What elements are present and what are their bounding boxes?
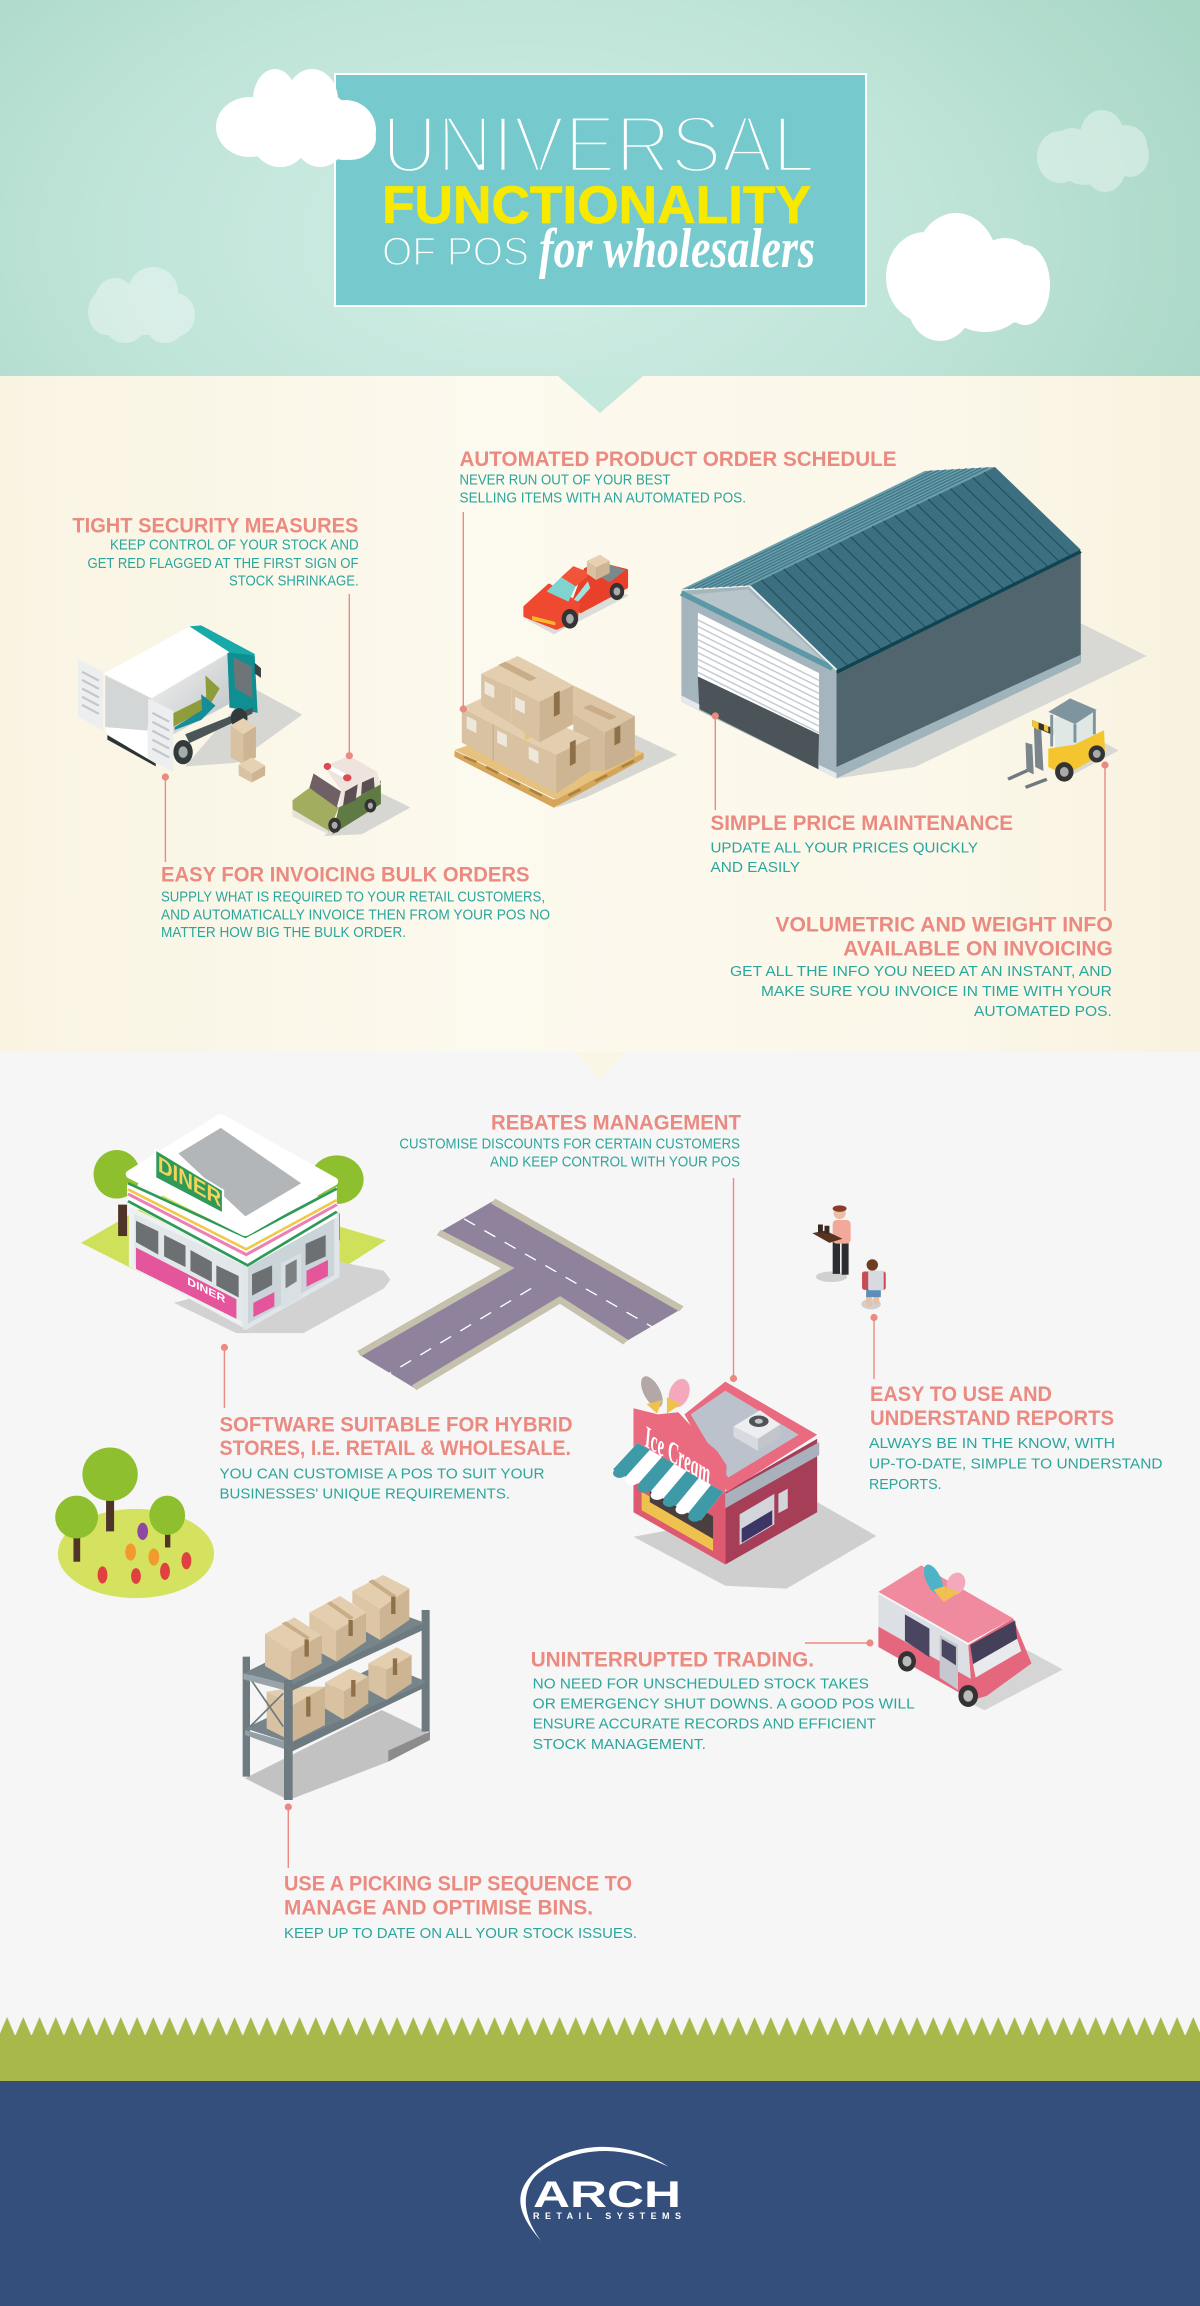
cloud: white right <box>886 213 1050 341</box>
logo: arch retail systems: RETAIL SYSTEMS <box>533 2211 681 2221</box>
callout: easy to use reports <box>869 1314 1163 1493</box>
title: for wholesalers: for wholesalers <box>539 218 815 280</box>
title box <box>335 74 866 306</box>
pointer: cream triangle <box>576 1052 625 1081</box>
panel: white retail section <box>0 1052 1200 2022</box>
callout: volumetric and weight info <box>730 761 1113 1020</box>
illustration: boxes on pallet <box>455 656 678 808</box>
callout: simple price maintenance: SIMPLE PRICE MAINTENANCE <box>710 812 1013 835</box>
callout: software suitable for hybrid stores: BUSINESSES' UNIQUE REQUIREMENTS. <box>220 1486 510 1503</box>
title: functionality: FUNCTIONALITY <box>382 176 811 235</box>
pointer: sky triangle <box>558 376 643 413</box>
panel: footer <box>0 2081 1200 2306</box>
illustration: ice cream truck <box>878 1562 1063 1710</box>
callout: easy to use reports: ALWAYS BE IN THE KNOW, WITH <box>869 1435 1115 1452</box>
illustration: waiter and child <box>812 1205 886 1309</box>
panel: sky header <box>0 0 1200 376</box>
callout: picking slip sequence: KEEP UP TO DATE ON ALL YOUR STOCK ISSUES. <box>284 1925 637 1942</box>
callout: uninterrupted trading <box>531 1639 915 1753</box>
callout: automated product order schedule: AUTOMATED PRODUCT ORDER SCHEDULE <box>460 448 896 471</box>
panel: cream warehouse section <box>0 376 1200 1052</box>
callout: simple price maintenance: UPDATE ALL YOUR PRICES QUICKLY <box>710 840 978 857</box>
callout: picking slip sequence: USE A PICKING SLIP SEQUENCE TO <box>284 1873 632 1896</box>
callout: uninterrupted trading: UNINTERRUPTED TRADING. <box>531 1648 814 1671</box>
callout: uninterrupted trading: STOCK MANAGEMENT. <box>533 1736 706 1753</box>
callout: automated product order schedule <box>460 448 896 713</box>
callout: rebates management: CUSTOMISE DISCOUNTS FOR CERTAIN CUSTOMERS <box>399 1136 740 1153</box>
callout: easy for invoicing bulk orders: MATTER HOW BIG THE BULK ORDER. <box>161 924 406 941</box>
illustration: ice cream shop <box>613 1373 876 1589</box>
illustration: warehouse <box>681 467 1147 778</box>
callout: easy to use reports: REPORTS. <box>869 1476 942 1493</box>
callout: software suitable for hybrid stores: SOFTWARE SUITABLE FOR HYBRID <box>220 1413 572 1436</box>
callout: easy to use reports: UP-TO-DATE, SIMPLE TO UNDERSTAND <box>869 1456 1163 1473</box>
callout: uninterrupted trading: OR EMERGENCY SHUT DOWNS. A GOOD POS WILL <box>533 1696 915 1713</box>
callout: easy for invoicing bulk orders <box>161 773 550 941</box>
illustration: diner: DINER <box>158 1151 221 1212</box>
callout: automated product order schedule: SELLING ITEMS WITH AN AUTOMATED POS. <box>460 489 746 506</box>
callout: tight security measures: GET RED FLAGGED AT THE FIRST SIGN OF <box>88 555 358 572</box>
callout: simple price maintenance: AND EASILY <box>710 859 800 876</box>
callout: tight security measures: KEEP CONTROL OF YOUR STOCK AND <box>110 537 359 554</box>
callout: tight security measures <box>72 514 359 759</box>
callout: simple price maintenance <box>710 712 1013 876</box>
grass strip <box>0 2017 1200 2081</box>
callout: rebates management <box>399 1112 741 1382</box>
callout: easy for invoicing bulk orders: SUPPLY WHAT IS REQUIRED TO YOUR RETAIL CUSTOMERS, <box>161 888 545 905</box>
callout: easy to use reports: EASY TO USE AND <box>870 1383 1052 1406</box>
illustration: delivery truck <box>78 625 302 782</box>
illustration: red pickup <box>525 555 629 634</box>
logo: arch retail systems: ARCH <box>533 2174 681 2215</box>
illustration: t-junction road <box>359 1201 681 1388</box>
callout: software suitable for hybrid stores <box>220 1344 572 1503</box>
illustration: forklift <box>1008 698 1119 787</box>
cloud: pale right <box>1037 110 1149 192</box>
cloud: pale left <box>88 267 195 343</box>
callout: rebates management: AND KEEP CONTROL WITH YOUR POS <box>490 1153 740 1170</box>
callout: easy for invoicing bulk orders: EASY FOR INVOICING BULK ORDERS <box>161 863 530 886</box>
callout: volumetric and weight info: MAKE SURE YOU INVOICE IN TIME WITH YOUR <box>761 983 1112 1000</box>
title: universal: UNIVERSAL <box>382 100 815 190</box>
callout: software suitable for hybrid stores: YOU CAN CUSTOMISE A POS TO SUIT YOUR <box>220 1466 545 1483</box>
logo: arch retail systems <box>520 2147 681 2242</box>
illustration: ice cream shop: Ice Cream <box>644 1418 710 1493</box>
callout: software suitable for hybrid stores: STORES, I.E. RETAIL & WHOLESALE. <box>220 1437 571 1460</box>
callout: volumetric and weight info: AVAILABLE ON INVOICING <box>843 938 1113 960</box>
illustration: ice cream truck: Ice Cream <box>880 1627 904 1651</box>
callout: picking slip sequence <box>284 1803 637 1942</box>
illustration: diner: DINER <box>187 1274 226 1306</box>
callout: picking slip sequence: MANAGE AND OPTIMISE BINS. <box>284 1897 593 1920</box>
callout: volumetric and weight info: VOLUMETRIC AND WEIGHT INFO <box>775 913 1113 936</box>
callout: uninterrupted trading: NO NEED FOR UNSCHEDULED STOCK TAKES <box>533 1676 869 1693</box>
cloud: white left <box>216 69 376 167</box>
title: of pos: OF POS <box>382 230 529 274</box>
callout: volumetric and weight info: AUTOMATED POS. <box>974 1003 1112 1020</box>
callout: automated product order schedule: NEVER RUN OUT OF YOUR BEST <box>460 472 670 488</box>
illustration: diner <box>81 1119 390 1333</box>
callout: tight security measures: TIGHT SECURITY MEASURES <box>72 514 358 538</box>
illustration: park with trees <box>55 1447 214 1598</box>
illustration: police car <box>293 756 410 836</box>
callout: easy for invoicing bulk orders: AND AUTOMATICALLY INVOICE THEN FROM YOUR POS NO <box>161 906 550 923</box>
callout: rebates management: REBATES MANAGEMENT <box>491 1112 741 1135</box>
callout: tight security measures: STOCK SHRINKAGE. <box>229 573 359 590</box>
callout: uninterrupted trading: ENSURE ACCURATE RECORDS AND EFFICIENT <box>533 1716 876 1733</box>
callout: easy to use reports: UNDERSTAND REPORTS <box>870 1407 1114 1430</box>
illustration: stock shelves <box>243 1575 430 1800</box>
callout: volumetric and weight info: GET ALL THE INFO YOU NEED AT AN INSTANT, AND <box>730 963 1112 980</box>
